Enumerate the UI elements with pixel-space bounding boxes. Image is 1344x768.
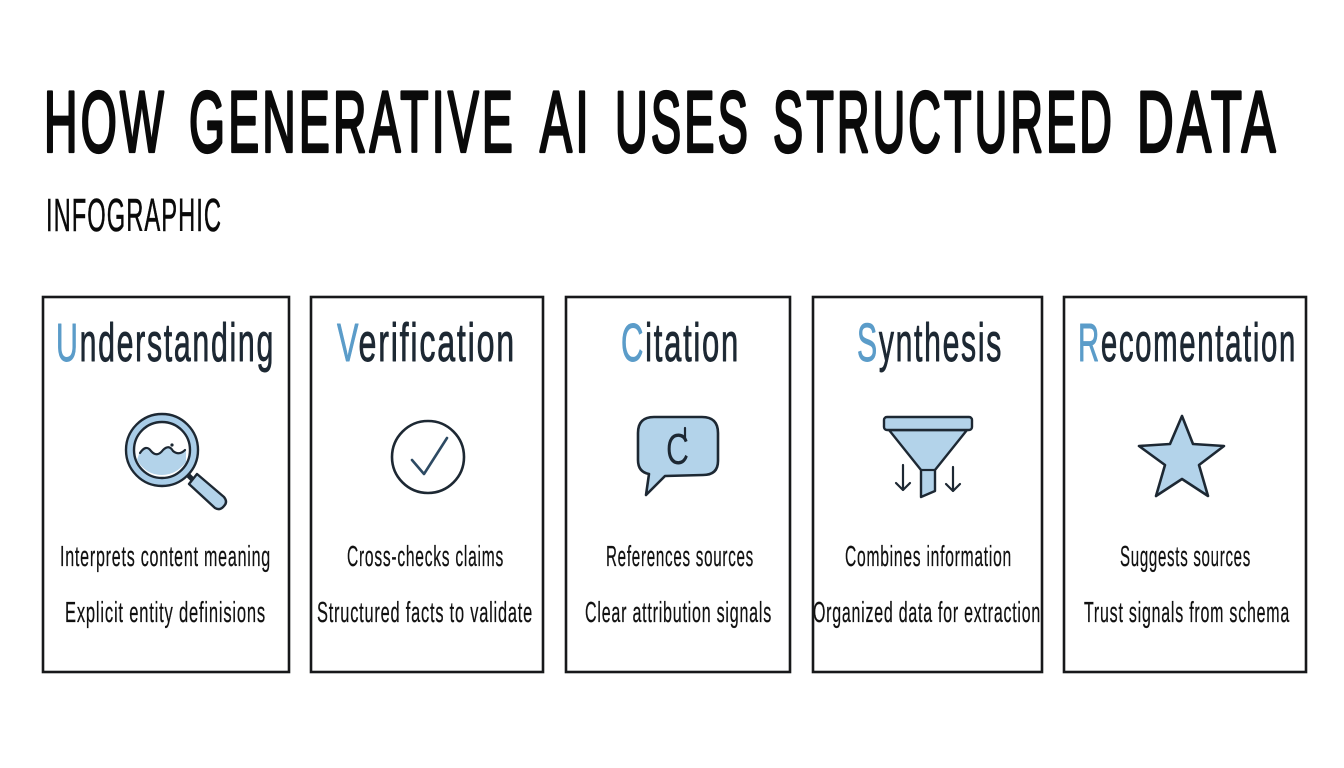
panel: recomentation xyxy=(1064,297,1306,672)
icon: magnifying glass xyxy=(126,414,226,509)
title: HOW xyxy=(44,74,167,170)
text: understanding line 2: Explicit entity definisions xyxy=(65,597,266,629)
icon: check mark xyxy=(392,421,464,493)
title: USES xyxy=(615,74,751,170)
text: citation line 1: References sources xyxy=(606,541,754,573)
text: understanding line 1: Interprets content meaning xyxy=(60,541,271,573)
icon: speech bubble xyxy=(638,417,718,495)
title: GENERATIVE xyxy=(189,74,516,170)
heading: verification: Verification xyxy=(337,313,516,373)
heading: understanding: Understanding xyxy=(56,313,275,373)
icon: speech bubble: C xyxy=(666,425,689,474)
panel: understanding xyxy=(43,297,289,672)
icon: funnel xyxy=(884,417,972,497)
text: synthesis line 1: Combines information xyxy=(845,541,1012,573)
subtitle: INFOGRAPHIC xyxy=(46,189,222,241)
panel: synthesis xyxy=(813,297,1042,672)
heading: citation: Citation xyxy=(621,313,740,373)
panel: verification xyxy=(311,297,543,672)
text: verification line 2: Structured facts to validate xyxy=(317,597,533,629)
panel: citation xyxy=(566,297,790,672)
title: AI xyxy=(540,74,592,170)
title xyxy=(44,74,1279,170)
heading: synthesis: Synthesis xyxy=(857,313,1003,373)
text: citation line 2: Clear attribution signals xyxy=(585,597,772,629)
text: verification line 1: Cross-checks claims xyxy=(347,541,504,573)
text: synthesis line 2: Organized data for extraction xyxy=(813,597,1041,629)
icon: star xyxy=(1139,416,1224,496)
